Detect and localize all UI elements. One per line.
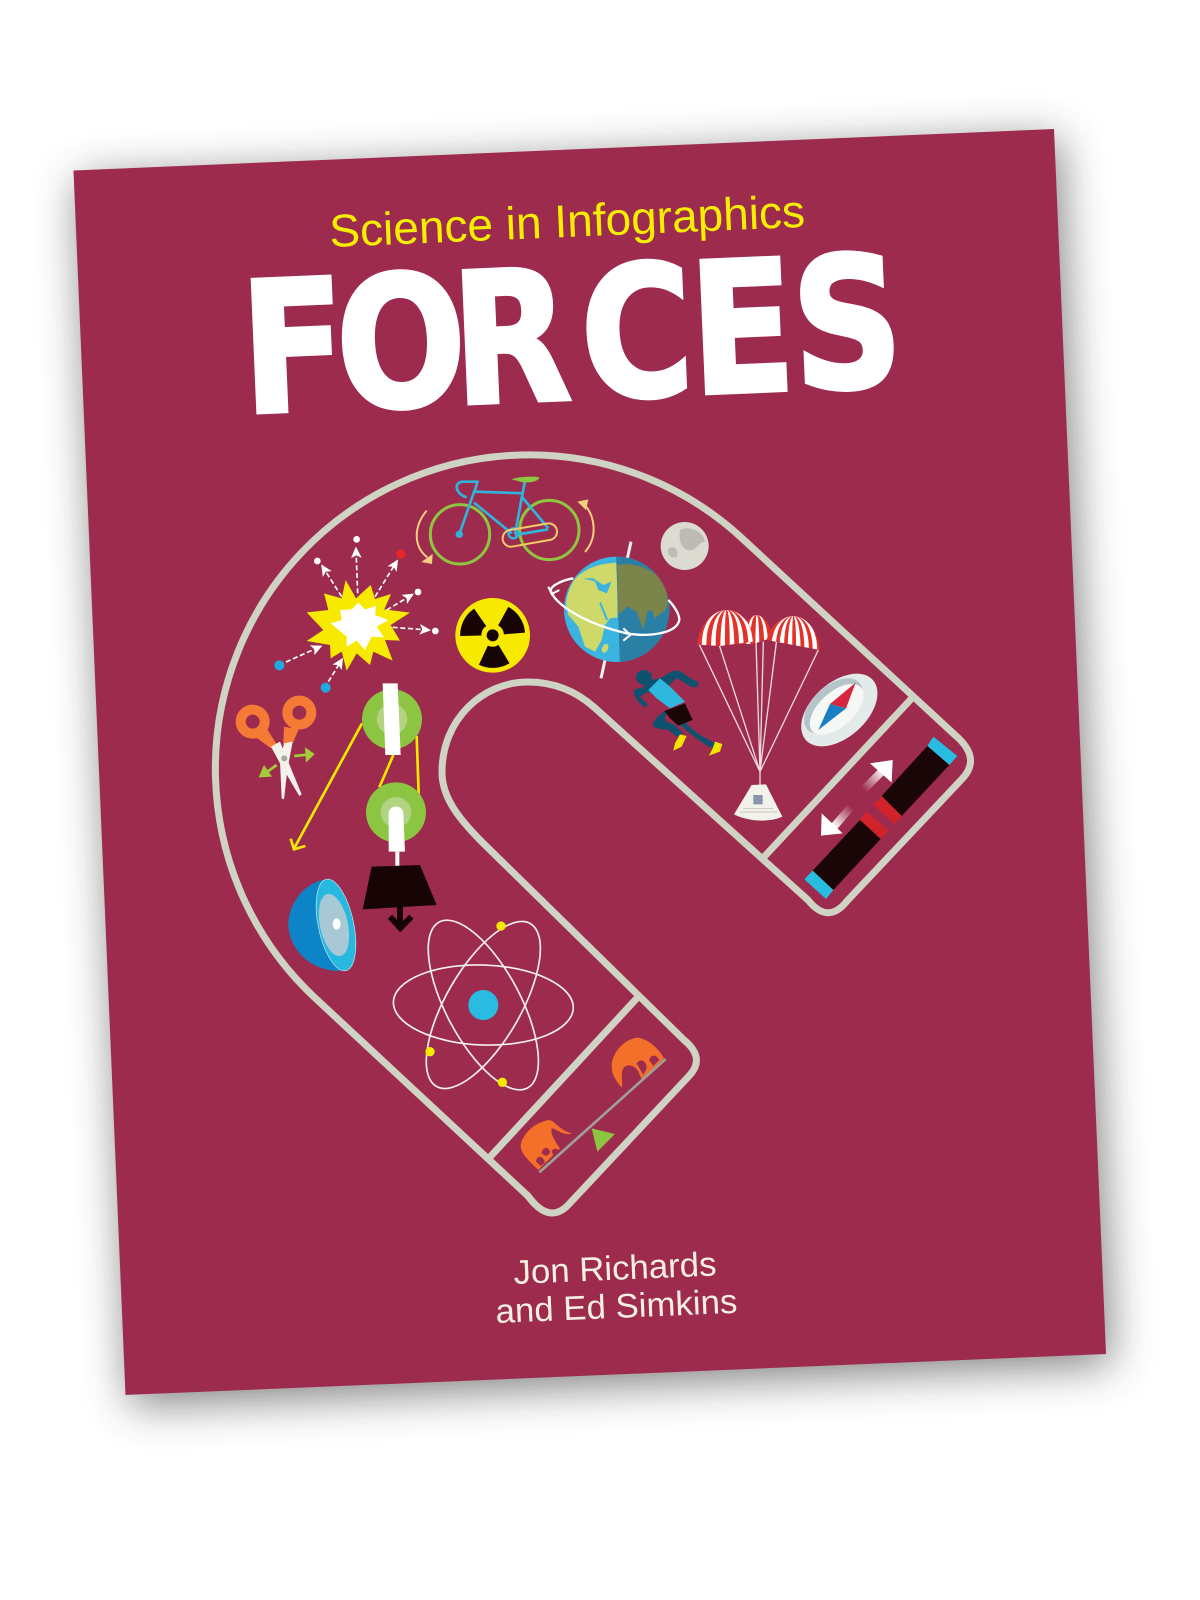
icon: parachutes and capsule [695, 608, 822, 821]
drop shadow [78, 139, 1111, 1405]
icon: upper pulley [362, 683, 422, 755]
icon: bicycle [417, 477, 594, 564]
panel: book cover [74, 129, 1106, 1395]
authors: Jon Richards [513, 1245, 717, 1292]
horseshoe magnet outline [215, 455, 971, 1213]
icon: scissors [241, 701, 315, 799]
series heading: Science in Infographics [328, 185, 806, 257]
icon: radiation symbol [453, 596, 532, 675]
icon: runner [634, 670, 722, 756]
icon group: right arm of magnet [548, 522, 957, 899]
icon: half sphere core [288, 876, 363, 974]
authors [495, 1245, 738, 1331]
title: FORCES [237, 216, 907, 456]
icon: pulley ropes [291, 723, 419, 849]
icon: seesaw with elephants [521, 1038, 666, 1172]
icon group: left arm of magnet [288, 782, 666, 1172]
icon: earth [548, 542, 679, 678]
book cover infographic [50, 110, 1140, 1434]
icon: explosion with particles [274, 536, 439, 693]
icon: compass [788, 660, 891, 760]
icon: lower pulley and weight [363, 782, 437, 928]
authors: and Ed Simkins [495, 1283, 738, 1331]
icon: atom [392, 904, 575, 1106]
icon: moon [661, 522, 709, 570]
icon: bar magnets repelling [804, 737, 957, 899]
icon group: upper left of magnet [241, 477, 594, 849]
